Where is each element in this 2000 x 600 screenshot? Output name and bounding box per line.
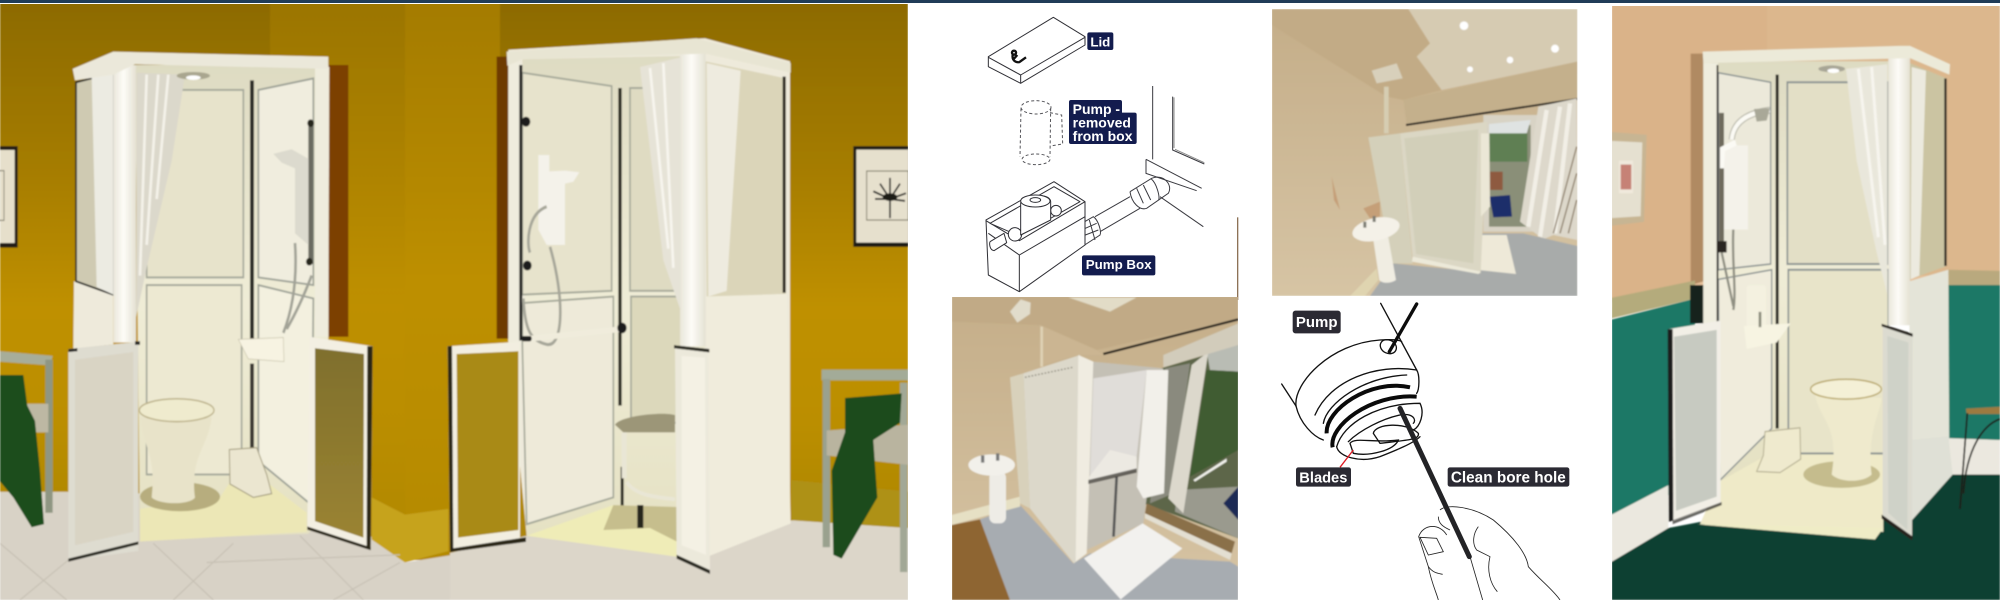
o-rings	[1327, 386, 1417, 447]
picture frame left	[0, 146, 18, 248]
ramp	[1084, 523, 1182, 599]
pump dashed outline	[1020, 101, 1063, 165]
wash basin	[968, 453, 1015, 523]
panel: photo cabin back view	[1272, 9, 1577, 296]
toilet left	[139, 399, 214, 503]
shower unit left	[273, 119, 314, 333]
wall and pipe drawing	[1085, 86, 1204, 245]
cabin body	[1700, 46, 1953, 532]
carpet	[1612, 474, 2000, 600]
chair and towel right	[822, 370, 908, 572]
label: pump box	[1082, 255, 1155, 275]
label: pump box: Pump Box	[1086, 257, 1152, 272]
wall shadow	[1691, 54, 1704, 285]
label: pump: Pump	[1296, 314, 1337, 331]
label: clean bore hole: Clean bore hole	[1451, 470, 1566, 487]
pump drawing	[1282, 303, 1422, 459]
cabin panel back	[1368, 122, 1490, 274]
photo edge	[1237, 217, 1238, 300]
red leader	[1340, 450, 1353, 467]
door right	[307, 337, 373, 550]
yellow room walls	[0, 0, 908, 560]
door right cabin open	[674, 345, 710, 574]
chair	[1960, 407, 2000, 509]
shower unit	[1717, 108, 1770, 310]
door right	[1882, 324, 1913, 540]
ceiling lights	[1460, 21, 1559, 72]
pedal box	[1757, 428, 1801, 473]
panel: pump box diagram	[986, 17, 1238, 300]
door left	[1668, 321, 1722, 524]
probe / bore rod	[1400, 408, 1469, 557]
ceiling box	[1010, 299, 1031, 323]
lid logo	[1012, 51, 1026, 62]
floor and carpet	[952, 497, 1238, 600]
door left	[68, 341, 140, 562]
label: blades: Blades	[1299, 471, 1347, 487]
label: pump removed: removed	[1073, 114, 1131, 130]
toilet	[1811, 379, 1882, 481]
floor	[1370, 233, 1577, 296]
patio door	[1143, 323, 1238, 560]
picture frame right	[853, 146, 908, 247]
shower and grab rails right	[519, 65, 627, 345]
label: lid	[1087, 32, 1113, 50]
lid drawing	[988, 17, 1085, 83]
panel: teal room photo with cabin	[1612, 0, 2000, 600]
ramp	[1697, 524, 1883, 540]
door left of right cabin	[448, 342, 526, 552]
curtain pole	[1406, 99, 1577, 125]
hand	[1419, 507, 1560, 600]
label: pump	[1293, 311, 1341, 333]
cabin right body	[507, 38, 791, 557]
right cabin scene	[448, 38, 908, 600]
cabin left body	[73, 52, 329, 541]
basin left	[238, 337, 284, 362]
chair and towel left	[0, 351, 53, 527]
panel: pump blades diagram	[1282, 303, 1569, 600]
pedal box left	[229, 448, 272, 497]
label: pump removed: Pump -	[1073, 101, 1120, 117]
panel: yellow room photo with two cabins	[0, 0, 908, 600]
left cabin scene	[0, 52, 500, 600]
gate lattice	[1553, 147, 1577, 233]
label: lid: Lid	[1090, 34, 1110, 49]
cabin body	[1010, 355, 1168, 563]
top rule	[0, 0, 2000, 3]
pump box drawing	[986, 182, 1085, 292]
window curtain	[1520, 98, 1577, 240]
wall damage	[1332, 177, 1380, 218]
panel: photo cabin with curtain	[952, 290, 1238, 600]
basin	[1744, 285, 1791, 349]
label: pump removed	[1069, 100, 1137, 144]
label: pump removed: from box	[1073, 128, 1133, 144]
probe in hole	[1389, 304, 1417, 352]
fold down seat	[615, 414, 675, 528]
patio opening	[1483, 115, 1540, 232]
ceiling box	[1372, 63, 1403, 83]
framed picture	[1612, 132, 1647, 226]
wainscot wall	[1612, 270, 2000, 562]
wash basin	[1350, 213, 1402, 283]
curtain rail	[1103, 319, 1238, 354]
